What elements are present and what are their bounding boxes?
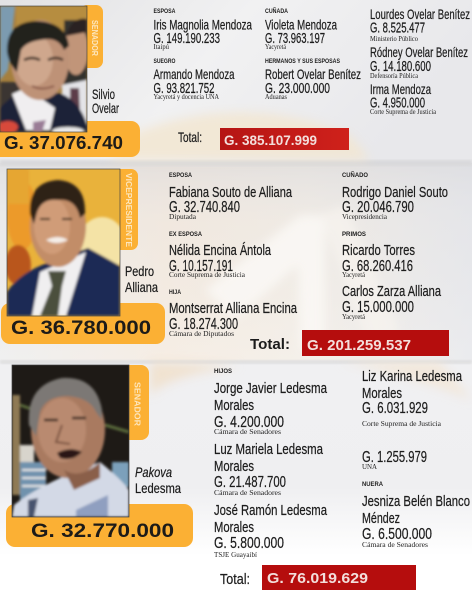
relative: esposa xyxy=(154,8,252,51)
relative: Luz Mariela: Luz Mariela Ledesma xyxy=(214,441,323,458)
relative: nuera: NUERA xyxy=(362,481,383,488)
relative: primos xyxy=(342,231,415,279)
relative: Lourdes: G. 8.525.477 xyxy=(370,20,425,36)
relative: suegro: Armando Mendoza xyxy=(154,66,235,82)
relative: esposa: G. 149.190.233 xyxy=(154,31,220,47)
relative: hija: Cámara de Diputados xyxy=(169,330,234,338)
relative: hija: Montserrat Alliana Encina xyxy=(169,300,297,317)
total: Total: xyxy=(220,571,250,588)
relative: esposa: Iris Magnolia Mendoza xyxy=(154,16,252,32)
relative: Luz Mariela: Cámara de Senadores xyxy=(214,489,281,497)
salary bar xyxy=(0,121,140,157)
relative: suegro: SUEGRO xyxy=(154,58,176,65)
relative: hermanos: HERMANOS Y SUS ESPOSAS xyxy=(265,58,341,65)
relative: ex esposa: EX ESPOSA xyxy=(169,231,202,238)
relative: José Ramón: G. 5.800.000 xyxy=(214,535,284,552)
name: Silvio xyxy=(92,86,115,102)
relative: Irma xyxy=(370,81,437,116)
panel: Pakova Ledesma xyxy=(6,365,470,590)
role tag: SENADOR xyxy=(90,20,99,56)
relative: ex esposa: G. 10.157.191 xyxy=(169,258,233,275)
relative: UNA amount: UNA xyxy=(362,463,377,471)
relative: Jorge Javier: Morales xyxy=(214,397,254,414)
relative: Liz Karina: Corte Suprema de Justicia xyxy=(362,420,442,428)
salary bar xyxy=(6,504,193,547)
relative: UNA amount xyxy=(362,449,427,471)
relative: cuñado: G. 20.046.790 xyxy=(342,199,414,216)
relative: hermanos: G. 23.000.000 xyxy=(265,81,330,97)
role tag: SENADOR xyxy=(132,382,142,426)
photo xyxy=(12,365,129,517)
relative: cuñado xyxy=(342,170,448,221)
relative: nuera: Cámara de Senadores xyxy=(362,541,428,549)
total: G. 385.107.999 xyxy=(224,132,317,148)
name: Alliana xyxy=(125,279,158,295)
total xyxy=(220,565,416,590)
relative: Irma: Irma Mendoza xyxy=(370,81,431,97)
name: Pedro xyxy=(125,263,154,279)
relative: Jorge Javier xyxy=(214,368,328,436)
salary bar: G. 32.770.000 xyxy=(31,521,174,542)
relative: José Ramón: José Ramón Ledesma xyxy=(214,502,327,519)
relative: primos: Yacyretá xyxy=(342,271,366,279)
total: G. 76.019.629 xyxy=(267,570,368,587)
relative: hermanos xyxy=(265,58,361,101)
name xyxy=(125,263,158,295)
panel: Pedro Alliana xyxy=(1,169,449,356)
relative: primos: PRIMOS xyxy=(342,231,367,238)
relative: esposa xyxy=(169,172,292,221)
name: Pakova xyxy=(135,464,172,480)
total: G. 201.259.537 xyxy=(307,337,411,354)
relative: cuñada xyxy=(265,6,337,51)
relative: Carlos Zarza: G. 15.000.000 xyxy=(342,299,414,316)
role tag xyxy=(122,365,149,440)
relative: esposa: Diputada xyxy=(169,213,197,221)
relative: Liz Karina: G. 6.031.929 xyxy=(362,400,428,417)
relative: ex esposa: Nélida Encina Ántola xyxy=(169,242,271,259)
relative: primos: Ricardo Torres xyxy=(342,242,415,259)
relative: ex esposa xyxy=(169,231,271,279)
relative: primos: G. 68.260.416 xyxy=(342,258,413,275)
relative: cuñado: CUÑADO xyxy=(342,170,368,179)
total: Total: xyxy=(250,336,290,353)
name xyxy=(92,86,119,116)
relative: esposa: ESPOSA xyxy=(169,172,192,179)
relative: Irma: Corte Suprema de Justicia xyxy=(370,108,437,116)
relative: esposa: ESPOSA xyxy=(154,8,176,15)
relative: hija: G. 18.274.300 xyxy=(169,316,238,333)
relative: Jorge Javier: Jorge Javier Ledesma xyxy=(214,380,328,397)
photo xyxy=(5,169,126,316)
relative: esposa: Fabiana Souto de Alliana xyxy=(169,184,292,201)
name: Ledesma xyxy=(135,480,181,496)
role tag xyxy=(80,5,103,68)
relative: hermanos: Aduanas xyxy=(265,93,287,101)
relative: cuñada: G. 73.963.197 xyxy=(265,31,325,47)
relative: suegro: Yacyretá y docencia UNA xyxy=(154,93,219,101)
relative: Luz Mariela: Morales xyxy=(214,458,254,475)
relative: José Ramón xyxy=(214,502,327,559)
relative: cuñada: Yacyretá xyxy=(265,43,287,51)
relative: Liz Karina: Morales xyxy=(362,385,402,402)
relative: UNA amount: G. 1.255.979 xyxy=(362,449,427,466)
salary bar: G. 37.076.740 xyxy=(4,133,123,153)
relative: Ródney: Defensoría Pública xyxy=(370,72,419,80)
panel: Silvio Ovelar xyxy=(0,5,470,157)
relative: Jorge Javier: Cámara de Senadores xyxy=(214,428,281,436)
relative: nuera: G. 6.500.000 xyxy=(362,526,432,543)
relative: Ródney xyxy=(370,44,468,80)
salary bar: G. 36.780.000 xyxy=(11,317,151,339)
relative: Carlos Zarza: Yacyretá xyxy=(342,313,366,321)
relative: Liz Karina xyxy=(362,368,462,428)
relative: suegro: G. 93.821.752 xyxy=(154,81,214,97)
relative: Luz Mariela xyxy=(214,441,323,497)
relative: hija: HIJA xyxy=(169,289,181,296)
relative: Luz Mariela: G. 21.487.700 xyxy=(214,474,286,491)
name xyxy=(135,464,181,496)
total: Total: xyxy=(178,129,202,145)
relative: Lourdes xyxy=(370,6,470,43)
relative: Carlos Zarza xyxy=(342,283,441,321)
relative: Irma: G. 4.950.000 xyxy=(370,96,425,112)
relative: nuera xyxy=(362,481,470,549)
relative: Jorge Javier: HIJOS xyxy=(214,368,233,375)
relative: Lourdes: Ministerio Público xyxy=(370,35,418,43)
relative: cuñado: Vicepresidencia xyxy=(342,213,388,221)
relative: hija xyxy=(169,289,297,338)
role tag: VICEPRESIDENTE xyxy=(124,173,133,248)
relative: ex esposa: Corte Suprema de Justicia xyxy=(169,271,246,279)
relative: esposa: Itaipú xyxy=(154,43,169,51)
total xyxy=(178,128,349,150)
salary bar xyxy=(1,303,165,344)
relative: cuñada: CUÑADA xyxy=(265,6,288,15)
name: Ovelar xyxy=(92,100,119,116)
role tag xyxy=(112,169,138,250)
relative: José Ramón: TSJE Guayaibí xyxy=(214,551,257,559)
total xyxy=(250,330,449,356)
relative: Jorge Javier: G. 4.200.000 xyxy=(214,414,284,431)
relative: nuera: Méndez xyxy=(362,510,400,527)
relative: Ródney: G. 14.180.600 xyxy=(370,59,431,75)
relative: suegro xyxy=(154,58,235,101)
photo xyxy=(0,6,88,135)
logo watermark xyxy=(110,112,472,400)
relative: cuñada: Violeta Mendoza xyxy=(265,16,337,32)
relative: esposa: G. 32.740.840 xyxy=(169,199,240,216)
relative: José Ramón: Morales xyxy=(214,519,254,536)
relative: hermanos: Robert Ovelar Benítez xyxy=(265,66,361,82)
